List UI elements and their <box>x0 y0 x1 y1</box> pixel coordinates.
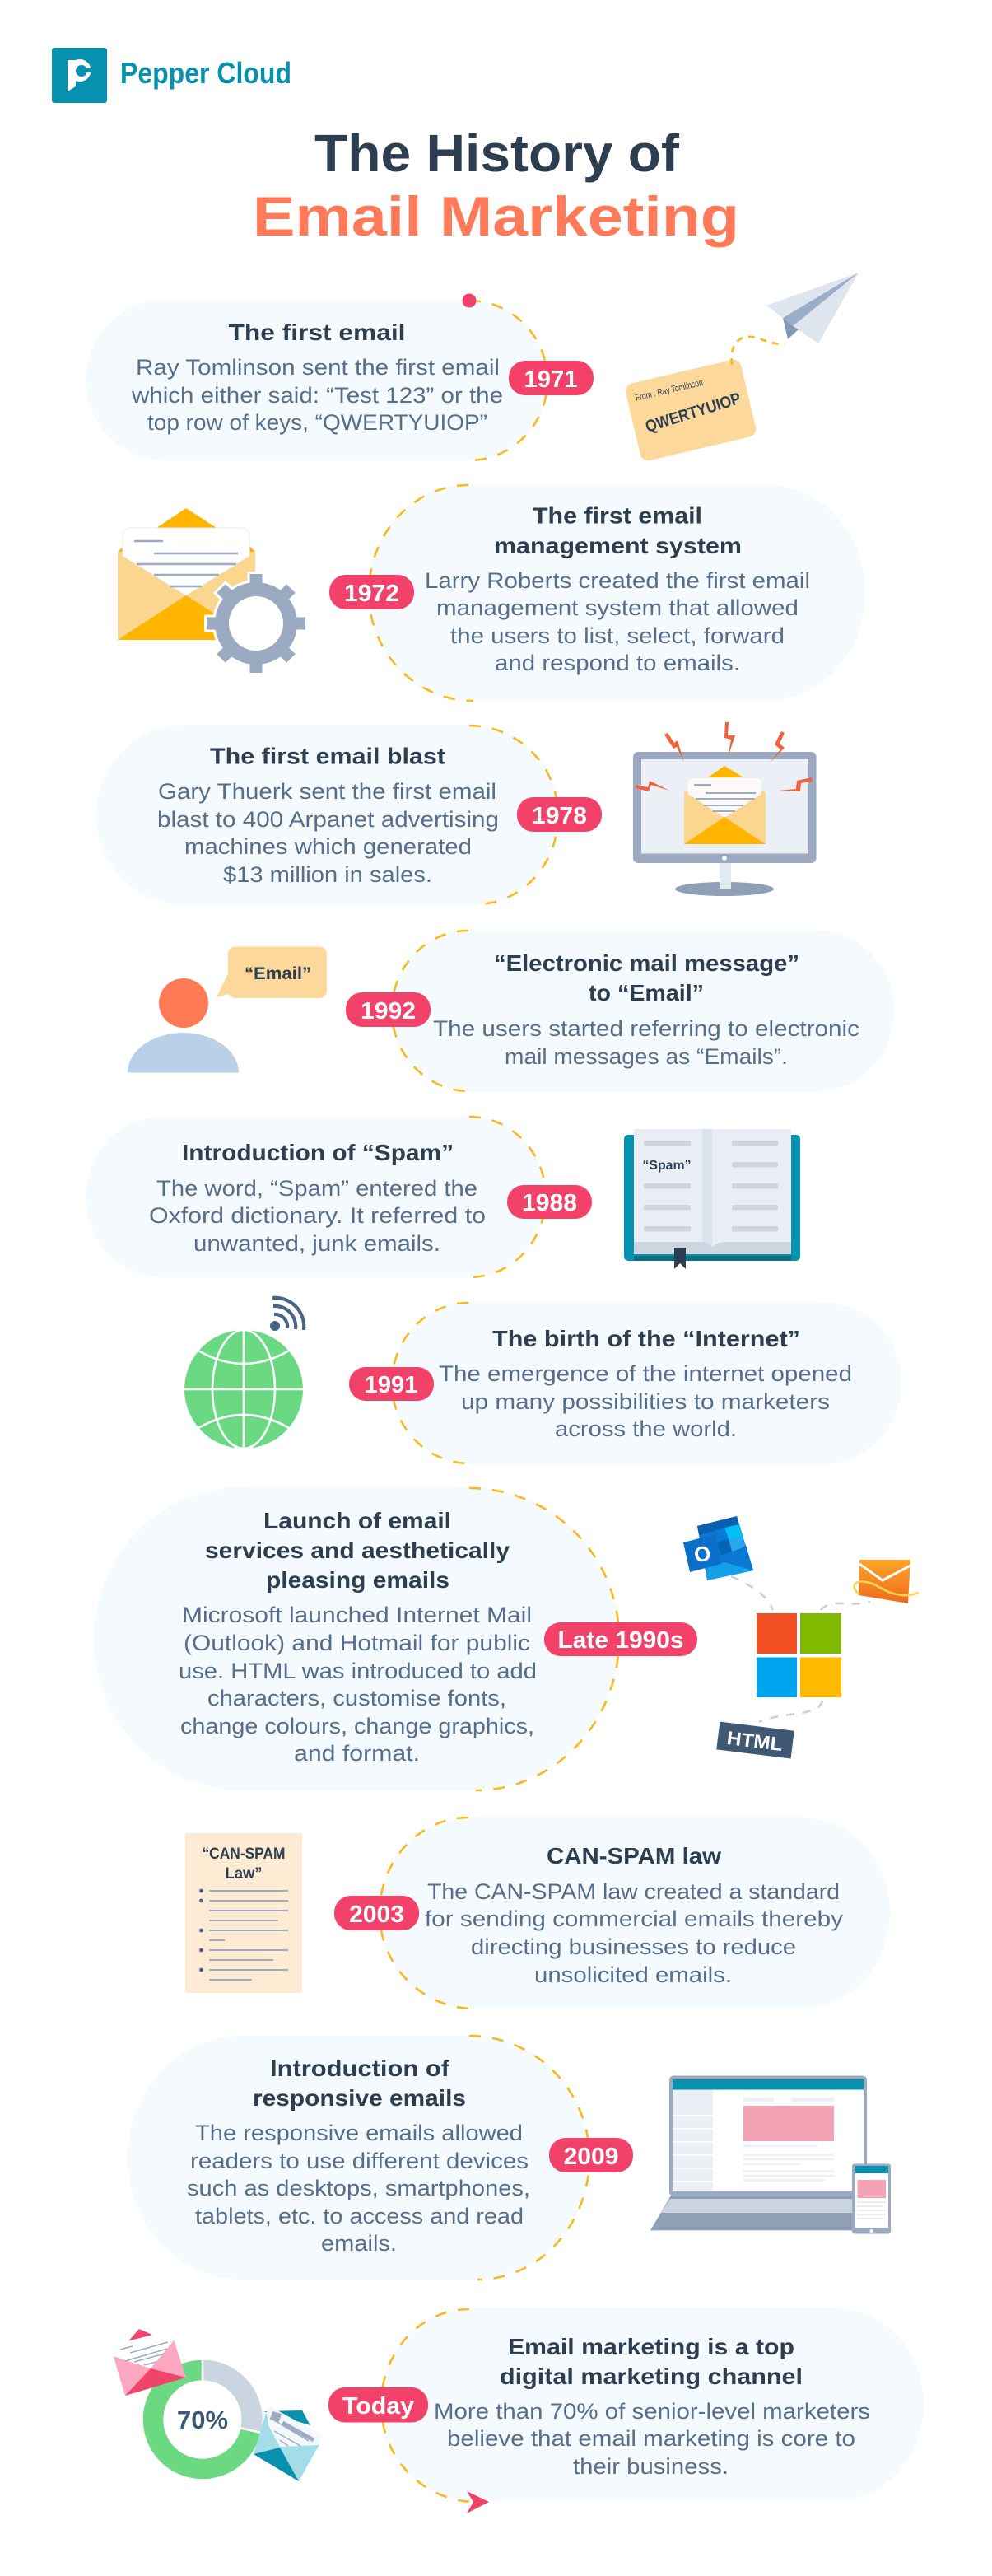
panel: 1971 the first email: Ray Tomlinson sent the first email <box>136 355 500 380</box>
panel: 1988 introduction of spam <box>86 1117 592 1277</box>
panel: 1988 introduction of spam: The word, “Spam” entered the <box>156 1176 477 1201</box>
panel: 1978 first email blast: The first email blast <box>210 743 445 769</box>
panel: late 1990s email services: use. HTML was introduced to add <box>179 1659 537 1683</box>
panel: 2003 CAN-SPAM law: CAN-SPAM law <box>547 1843 721 1869</box>
year badge today: Today <box>342 2393 414 2420</box>
panel: late 1990s email services: pleasing emails <box>266 1567 449 1593</box>
icon: CAN-SPAM law document: Law” <box>226 1865 262 1883</box>
icon: open book: “Spam” <box>642 1159 692 1173</box>
letter card: From : Ray Tomlinson <box>635 378 704 404</box>
panel: 1992 electronic mail message to email: to “Email” <box>589 980 704 1006</box>
icon: monitor with email alert <box>633 722 817 896</box>
icon: Outlook, Hotmail, HTML linked to Microsoft logo <box>683 1516 919 1758</box>
panel: 1978 first email blast: machines which generated <box>184 834 472 859</box>
panel: 2003 CAN-SPAM law: directing businesses to reduce <box>471 1934 796 1959</box>
panel: 1972 first email management system: management system <box>494 533 742 558</box>
panel: 1992 electronic mail message to email: “Electronic mail message” <box>494 950 799 976</box>
year badge late 1990s: Late 1990s <box>558 1627 683 1654</box>
panel: 2003 CAN-SPAM law: for sending commercial emails thereby <box>425 1906 844 1931</box>
gear <box>207 574 305 673</box>
page lines <box>644 1141 778 1232</box>
panel: today email marketing is top channel: believe that email marketing is core to <box>447 2426 855 2451</box>
icon: person with speech bubble <box>128 947 327 1072</box>
panel: 1991 birth of the internet: up many possibilities to marketers <box>461 1389 830 1414</box>
year badge 1992: 1992 <box>361 998 416 1024</box>
logo wordmark: Pepper Cloud <box>120 56 291 90</box>
panel: today email marketing is top channel: More than 70% of senior-level marketers <box>434 2399 870 2424</box>
HTML tag <box>716 1722 794 1758</box>
panel: 2003 CAN-SPAM law: unsolicited emails. <box>534 1962 732 1987</box>
panel: today email marketing is top channel: their business. <box>573 2454 729 2479</box>
year badge 1991 <box>349 1367 434 1401</box>
icon: teal envelope <box>254 2406 321 2481</box>
icon: paper plane and letter <box>624 273 859 462</box>
panel: 1992 electronic mail message to email: The users started referring to electronic <box>433 1016 859 1041</box>
panel: 1978 first email blast <box>96 725 602 905</box>
letter card <box>624 358 757 462</box>
panel: 2009 responsive emails: Introduction of <box>270 2056 450 2081</box>
panel: late 1990s email services: and format. <box>294 1741 420 1766</box>
panel: 1972 first email management system <box>329 484 865 701</box>
logo: Pepper Cloud <box>52 48 291 103</box>
panel: late 1990s email services: Microsoft launched Internet Mail <box>182 1603 532 1627</box>
HTML tag: HTML <box>726 1727 784 1755</box>
lightning bolts <box>636 722 813 791</box>
year badge today <box>328 2387 428 2423</box>
panel: 2009 responsive emails: emails. <box>321 2231 397 2256</box>
icon: person with speech bubble: “Email” <box>245 964 311 983</box>
panel: 1971 the first email: which either said: “Test 123” or the <box>131 383 503 408</box>
panel: 1988 introduction of spam: unwanted, junk emails. <box>193 1231 440 1256</box>
title <box>253 124 739 248</box>
wifi arcs <box>270 1298 304 1331</box>
icon: CAN-SPAM law document: “CAN-SPAM <box>203 1846 285 1863</box>
year badge 1978 <box>517 797 602 832</box>
panel: 2009 responsive emails: such as desktops, smartphones, <box>187 2176 530 2200</box>
panel: today email marketing is top channel: Email marketing is a top <box>508 2334 794 2359</box>
panel: 1972 first email management system: and respond to emails. <box>495 651 740 675</box>
panel: 2009 responsive emails: tablets, etc. to access and read <box>195 2204 524 2228</box>
icon: CAN-SPAM law document <box>185 1833 302 1993</box>
year badge 2003 <box>334 1896 419 1930</box>
panel: 1991 birth of the internet: The emergence of the internet opened <box>439 1361 852 1386</box>
panel: 1972 first email management system: management system that allowed <box>436 595 799 620</box>
title: The History of <box>314 124 680 183</box>
icon: envelope with gear <box>118 508 305 673</box>
panel: 1978 first email blast: $13 million in sales. <box>223 862 432 887</box>
letter card: QWERTYUIOP <box>643 390 743 436</box>
year badge 2003: 2003 <box>349 1902 404 1928</box>
panel: 1972 first email management system: The first email <box>533 502 702 529</box>
panel: 1971 the first email <box>86 293 594 460</box>
panel: late 1990s email services: change colours, change graphics, <box>180 1714 534 1738</box>
year badge 1972 <box>329 575 414 609</box>
icon: open book <box>624 1129 800 1269</box>
year badge 1988 <box>507 1185 592 1219</box>
icon: logo mark <box>52 48 107 103</box>
year badge 1971 <box>509 361 594 395</box>
icon: laptop and phone showing responsive email <box>650 2075 891 2233</box>
panel: late 1990s email services: (Outlook) and Hotmail for public <box>184 1631 530 1655</box>
panel: today email marketing is top channel: digital marketing channel <box>500 2364 803 2389</box>
bullets <box>199 1889 203 1972</box>
year badge 2009: 2009 <box>563 2144 619 2170</box>
panel: 2003 CAN-SPAM law: The CAN-SPAM law created a standard <box>427 1879 840 1904</box>
icon: Outlook: O <box>692 1540 714 1568</box>
panel: 1972 first email management system: the users to list, select, forward <box>450 623 785 648</box>
year badge 1972: 1972 <box>344 581 399 607</box>
panel: 1992 electronic mail message to email: mail messages as “Emails”. <box>505 1044 788 1069</box>
panel: late 1990s email services: Launch of email <box>263 1508 451 1533</box>
year badge 1971: 1971 <box>524 366 578 393</box>
year badge late 1990s <box>544 1622 697 1656</box>
panel: 2009 responsive emails: readers to use different devices <box>190 2149 529 2173</box>
panel: 1971 the first email: top row of keys, “QWERTYUIOP” <box>147 410 487 435</box>
year badge 1988: 1988 <box>522 1190 577 1216</box>
panel: late 1990s email services <box>94 1487 697 1790</box>
icon: globe with wifi signal <box>184 1298 304 1449</box>
chart: 70% donut with envelopes <box>114 2329 321 2481</box>
panel: late 1990s email services: characters, customise fonts, <box>207 1686 506 1710</box>
year badge 2009 <box>549 2138 633 2172</box>
title: Email Marketing <box>253 185 739 248</box>
panel: 2009 responsive emails: The responsive emails allowed <box>195 2121 523 2145</box>
panel: 1978 first email blast: Gary Thuerk sent the first email <box>158 779 496 804</box>
panel: 1991 birth of the internet: across the world. <box>555 1416 737 1441</box>
year badge 1992 <box>346 992 431 1027</box>
panel: 1992 electronic mail message to email <box>346 931 894 1091</box>
panel: 1988 introduction of spam: Introduction of “Spam” <box>182 1140 454 1165</box>
panel: today email marketing is top channel <box>328 2308 924 2513</box>
year badge 1978: 1978 <box>532 803 587 829</box>
panel: 1991 birth of the internet: The birth of the “Internet” <box>492 1326 800 1351</box>
year badge 1991: 1991 <box>364 1372 418 1398</box>
panel: 1972 first email management system: Larry Roberts created the first email <box>425 568 810 593</box>
phone <box>852 2164 891 2233</box>
icon: pink envelope <box>114 2329 186 2396</box>
panel: 1988 introduction of spam: Oxford dictionary. It referred to <box>149 1203 486 1228</box>
panel: 2009 responsive emails <box>128 2036 633 2280</box>
icon: Outlook <box>683 1516 753 1580</box>
arrow head <box>467 2491 489 2513</box>
icon: Microsoft logo <box>757 1613 841 1697</box>
chart: 70% donut with envelopes: 70% <box>177 2406 228 2434</box>
panel: 1991 birth of the internet <box>349 1303 901 1463</box>
icon: Hotmail <box>855 1560 919 1603</box>
panel: late 1990s email services: services and aesthetically <box>205 1538 510 1563</box>
panel: 2009 responsive emails: responsive emails <box>253 2085 466 2111</box>
panel: 1978 first email blast: blast to 400 Arpanet advertising <box>157 807 499 832</box>
panel: 1971 the first email: The first email <box>229 320 405 345</box>
panel: 2003 CAN-SPAM law <box>334 1818 890 2009</box>
